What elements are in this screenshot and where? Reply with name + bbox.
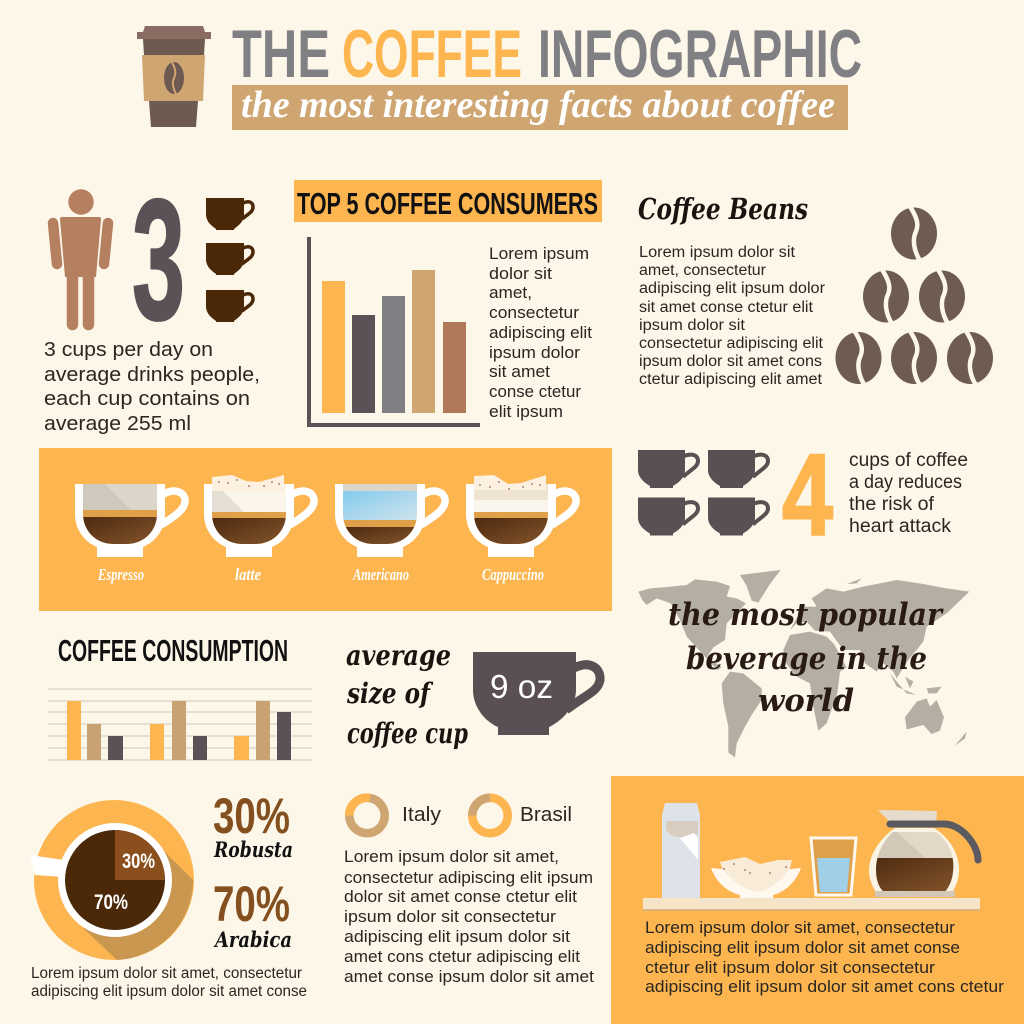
- text: heart attack: cups of coffee: [849, 450, 968, 471]
- stat: robusta: [213, 788, 293, 862]
- text: countries description: ipsum dolor sit consectetur: [344, 908, 557, 926]
- panel: coffee types: [39, 448, 612, 611]
- text: average size of coffee cup: average: [346, 639, 451, 672]
- icon: pile of coffee beans: [836, 206, 993, 385]
- text: consumers description: sit amet: [489, 362, 550, 381]
- text: cups per day: average 255 ml: [44, 413, 191, 435]
- text: consumers description: elit ipsum: [489, 402, 563, 421]
- icon: glass of water: [811, 838, 856, 895]
- text: ingredients description: Lorem ipsum dolor sit amet, consectetur: [645, 918, 955, 937]
- text: countries description: amet conse ipsum dolor sit amet: [344, 968, 594, 986]
- text: consumers description: [489, 244, 592, 421]
- big number 4: 4: [782, 430, 833, 560]
- legend: italy: [349, 798, 441, 833]
- stat: arabica: 70%: [213, 876, 290, 932]
- text: heart attack: a day reduces: [849, 472, 962, 493]
- bar chart: top 5 consumers: [309, 237, 480, 425]
- icon: sugar bowl: [711, 857, 801, 898]
- text: coffee beans description: [639, 244, 825, 388]
- text: cups per day: [44, 339, 260, 435]
- cup labels: Espresso: [97, 565, 144, 584]
- text: countries description: amet cons ctetur adipiscing elit: [344, 948, 580, 966]
- text: pie description: adipiscing elit ipsum dolor sit amet conse: [31, 983, 307, 1000]
- stat: robusta: Robusta: [213, 837, 293, 862]
- text: coffee beans description: ipsum dolor sit: [639, 317, 746, 334]
- legend: italy: Italy: [402, 804, 441, 826]
- subtitle banner: the most interesting facts about coffee: [241, 84, 835, 126]
- cup labels: Cappuccino: [482, 565, 544, 584]
- text: coffee beans description: ipsum dolor sit amet cons: [639, 353, 822, 370]
- text: ingredients description: [645, 918, 1004, 996]
- text: coffee beans description: sit amet conse ctetur elit: [639, 299, 814, 316]
- text: consumers description: adipiscing elit: [489, 323, 592, 342]
- icon: person: [53, 189, 108, 324]
- stat: robusta: 30%: [213, 788, 290, 844]
- icon: four cups: [638, 450, 768, 536]
- title: COFFEE: [342, 16, 522, 92]
- text: consumers description: conse ctetur: [489, 382, 581, 401]
- title: THE: [232, 16, 330, 92]
- text: pie description: [31, 965, 307, 1000]
- text: coffee beans description: consectetur adipiscing elit: [639, 335, 824, 352]
- text: consumers description: consectetur: [489, 303, 579, 322]
- shelf: [643, 898, 980, 911]
- text: countries description: consectetur adipiscing elit ipsum: [344, 869, 593, 887]
- text: ingredients description: ctetur elit ipsum dolor sit consectetur: [645, 958, 935, 977]
- text: countries description: Lorem ipsum dolor sit amet,: [344, 848, 559, 866]
- text: coffee beans description: adipiscing elit ipsum dolor: [639, 280, 825, 297]
- text: most popular beverage: world: [758, 683, 854, 719]
- heading: coffee consumption: COFFEE CONSUMPTION: [58, 633, 288, 668]
- chart: coffee cup top view pie: 30%: [122, 850, 155, 873]
- cup: cappuccino: [466, 475, 576, 557]
- text: heart attack: [849, 450, 968, 537]
- text: heart attack: heart attack: [849, 516, 952, 537]
- panel: coffee ingredients: [611, 776, 1024, 1024]
- text: most popular beverage: beverage in the: [686, 641, 927, 677]
- text: average size of coffee cup: [346, 639, 468, 750]
- text: countries description: adipiscing elit ipsum dolor sit: [344, 928, 570, 946]
- cup labels: [97, 565, 544, 584]
- big number 3: 3: [132, 164, 185, 356]
- heading: coffee beans: Coffee Beans: [638, 192, 808, 226]
- text: cups per day: average drinks people,: [44, 364, 260, 386]
- text: average size of coffee cup: size of: [346, 677, 434, 710]
- text: consumers description: ipsum dolor: [489, 343, 580, 362]
- cup labels: Americano: [352, 565, 409, 584]
- text: average size of coffee cup: coffee cup: [347, 717, 468, 750]
- text: cups per day: 3 cups per day on: [44, 339, 213, 361]
- text: coffee beans description: Lorem ipsum dolor sit: [639, 244, 796, 261]
- legend: brasil: Brasil: [520, 804, 572, 826]
- heading: top 5 coffee consumers: [294, 180, 602, 222]
- bar chart: coffee consumption: [48, 689, 312, 760]
- text: pie description: Lorem ipsum dolor sit amet, consectetur: [31, 965, 302, 982]
- icon: 9 oz cup: 9 oz: [490, 668, 553, 705]
- text: consumers description: Lorem ipsum: [489, 244, 589, 263]
- text: consumers description: amet,: [489, 283, 532, 302]
- icon: three cups: [206, 198, 253, 322]
- text: coffee beans description: amet, consectetur: [639, 262, 766, 279]
- cup: americano: [335, 484, 445, 557]
- cup labels: latte: [235, 565, 261, 584]
- text: most popular beverage: the most popular: [668, 597, 944, 633]
- stat: arabica: Arabica: [213, 927, 292, 952]
- title: INFOGRAPHIC: [538, 16, 862, 92]
- cup: espresso: [75, 484, 185, 557]
- text: most popular beverage: [668, 597, 944, 719]
- text: coffee beans description: ctetur adipiscing elit amet: [639, 371, 823, 388]
- icon: milk carton: [662, 803, 700, 898]
- icon: 9 oz cup: [473, 652, 600, 735]
- icon: takeaway coffee cup: [137, 26, 211, 127]
- text: countries description: [344, 848, 594, 986]
- chart: coffee cup top view pie: [30, 800, 194, 960]
- icon: coffee pot: [869, 810, 978, 897]
- text: cups per day: each cup contains on: [44, 388, 250, 410]
- chart: coffee cup top view pie: 70%: [94, 891, 128, 914]
- text: consumers description: dolor sit: [489, 264, 552, 283]
- text: countries description: dolor sit amet conse ctetur elit: [344, 888, 577, 906]
- title: [232, 16, 862, 92]
- legend: brasil: [472, 798, 572, 833]
- text: ingredients description: adipiscing elit ipsum dolor sit amet cons ctetur: [645, 977, 1004, 996]
- world map: [638, 570, 969, 757]
- cup: latte: [204, 475, 314, 557]
- stat: arabica: [213, 876, 292, 952]
- heading: top 5 coffee consumers: TOP 5 COFFEE CONSUMERS: [297, 186, 598, 221]
- text: heart attack: the risk of: [849, 494, 935, 515]
- text: ingredients description: adipiscing elit ipsum dolor sit amet conse: [645, 938, 960, 957]
